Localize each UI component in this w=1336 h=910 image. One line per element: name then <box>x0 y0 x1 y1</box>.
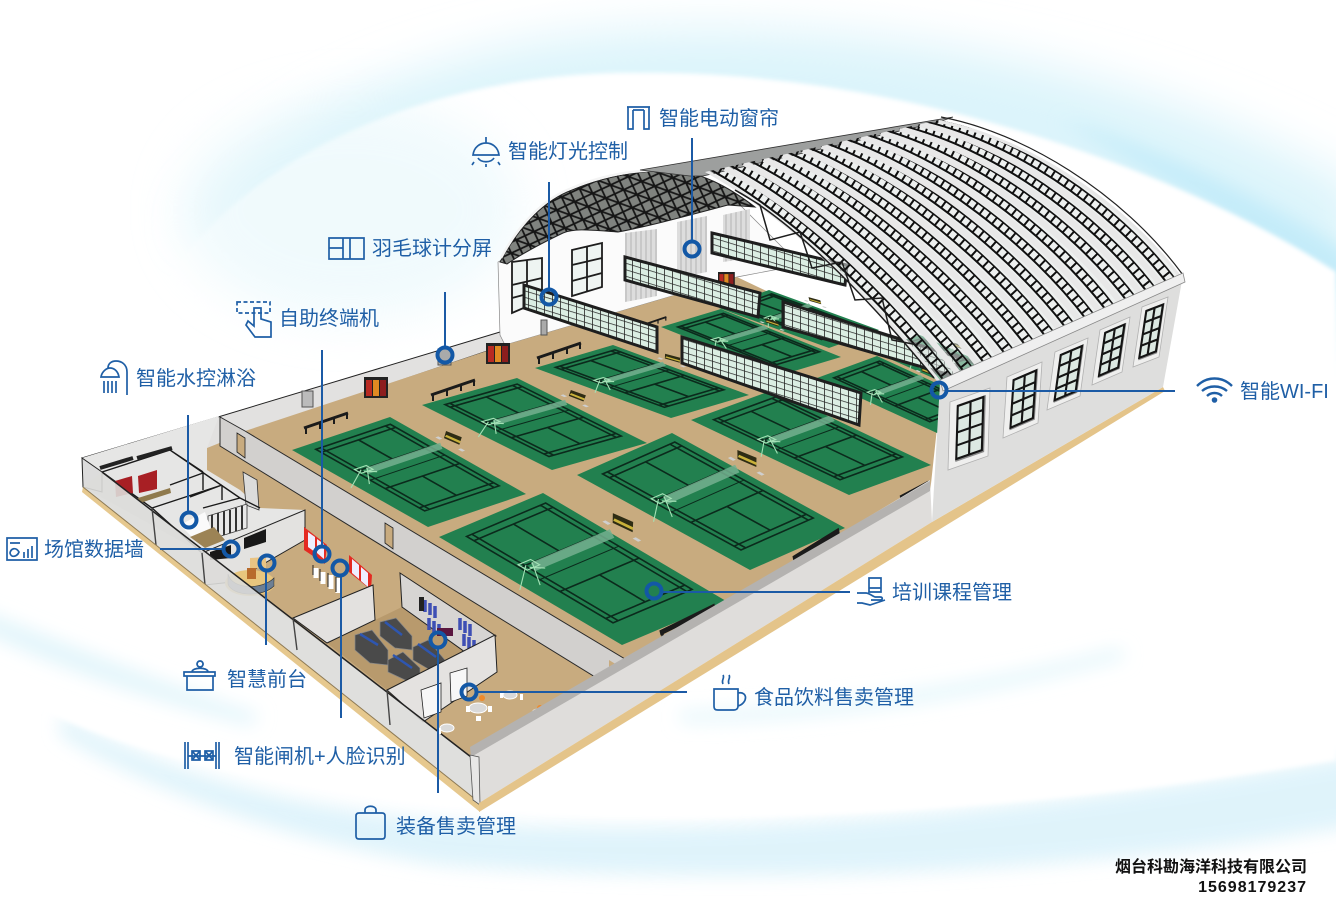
vending machines and wall boxes <box>302 272 735 407</box>
partition wall <box>220 417 630 680</box>
outer right wall <box>470 387 1165 812</box>
clothing racks <box>419 597 474 652</box>
callout: equipment sales: 装备售卖管理 <box>396 815 516 838</box>
reception desk <box>225 557 275 596</box>
end wall windows <box>512 243 602 313</box>
icon: curtain <box>627 107 650 129</box>
icon: ceiling lamp <box>472 137 500 167</box>
arched roof truss <box>500 114 1196 385</box>
building illustration <box>82 114 1196 812</box>
callout: smart wifi <box>932 378 1329 403</box>
icon: reception desk <box>184 661 215 690</box>
benches <box>304 317 929 644</box>
lobby wall with data screens <box>202 510 305 585</box>
callout: smart curtains: 智能电动窗帘 <box>659 107 779 130</box>
callout: smart gate and face recognition: 智能闸机+人脸识别 <box>234 745 406 768</box>
back wall of hall <box>82 332 505 490</box>
callout: training course management <box>646 578 1012 605</box>
company name and phone: 烟台科勘海洋科技有限公司 <box>1115 857 1307 876</box>
callout: equipment sales <box>356 632 516 839</box>
callout: venue data wall <box>7 538 238 561</box>
store shelves <box>355 618 445 682</box>
cafe tables and chairs <box>438 691 544 737</box>
ridge band <box>640 117 953 176</box>
icon: hand with course <box>857 578 885 605</box>
drink fridges <box>421 668 467 718</box>
icon: data wall <box>7 538 37 560</box>
hanging division screens <box>524 233 957 425</box>
callout: smart lighting: 智能灯光控制 <box>508 140 628 163</box>
curtains <box>625 209 750 302</box>
badminton courts <box>287 286 1022 647</box>
callout: smart lighting <box>472 137 628 304</box>
retail store block <box>293 573 497 722</box>
callout: smart curtains <box>627 107 779 256</box>
callout: score screen: 羽毛球计分屏 <box>372 237 492 260</box>
callout: food and drink sales <box>462 675 914 710</box>
callout: smart gate and face recognition <box>185 560 406 769</box>
callout: smart reception: 智慧前台 <box>227 668 307 691</box>
callout: score screen <box>329 237 492 362</box>
lobby floor <box>202 438 620 757</box>
hall wooden floor <box>245 277 965 662</box>
icon: shopping bag <box>356 806 385 839</box>
outer left wall <box>82 472 480 812</box>
icon: coffee cup <box>714 675 746 710</box>
right end wall with windows <box>932 273 1185 522</box>
store shelf blue tops <box>360 622 436 668</box>
callout: smart shower <box>101 361 256 528</box>
white end wall <box>498 200 800 345</box>
icon: shower <box>101 361 127 395</box>
changing rooms block <box>82 416 305 553</box>
callout: food and drink sales: 食品饮料售卖管理 <box>754 686 914 709</box>
icon: touch terminal <box>237 302 270 313</box>
callout: smart shower: 智能水控淋浴 <box>136 367 256 390</box>
near arch diagonal bracing <box>735 190 934 378</box>
kiosks and face recognition gates <box>304 527 372 593</box>
callout: smart reception <box>184 556 307 691</box>
callout: smart wifi: 智能WI-FI <box>1240 380 1329 403</box>
outer arch line <box>941 117 1183 275</box>
company name and phone: 15698179237 <box>1198 879 1307 896</box>
company name and phone <box>1115 857 1307 896</box>
near arch chord <box>501 170 665 258</box>
roof ribs <box>705 114 1196 385</box>
callout: self-service terminal <box>237 302 379 562</box>
callout: training course management: 培训课程管理 <box>892 581 1012 604</box>
icon: turnstile <box>185 742 219 769</box>
icon: wifi <box>1197 378 1232 402</box>
callout: venue data wall: 场馆数据墙 <box>44 538 144 561</box>
icon: scoreboard <box>329 238 364 259</box>
inner end truss <box>500 170 755 264</box>
callout: self-service terminal: 自助终端机 <box>279 307 379 330</box>
